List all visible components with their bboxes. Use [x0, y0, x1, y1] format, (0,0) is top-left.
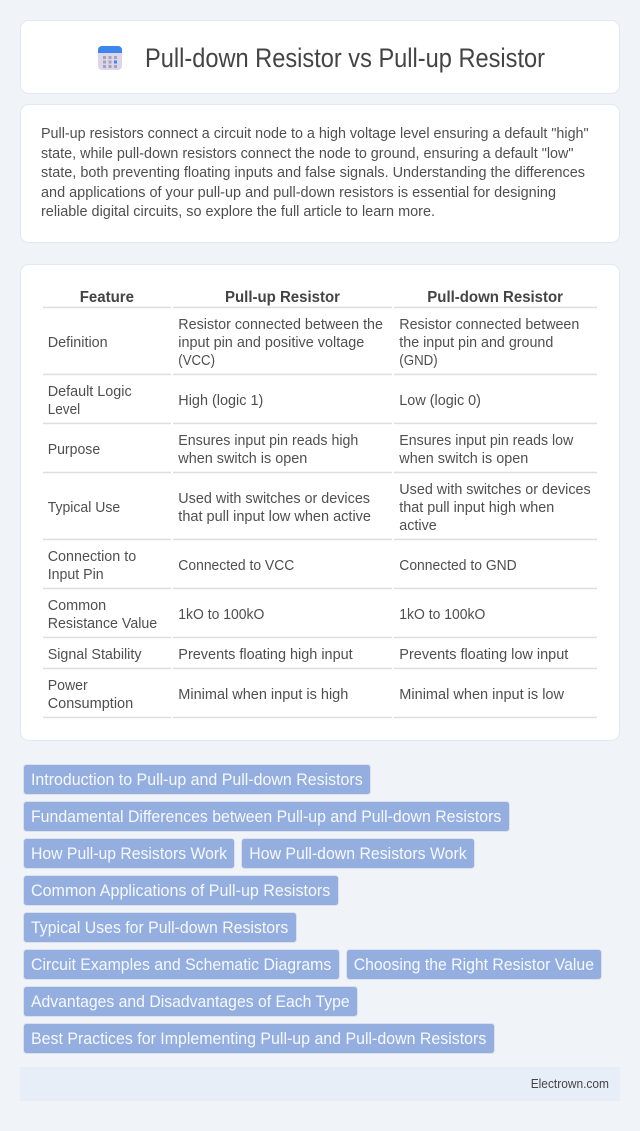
- table row: connection to input pin: Connection to: [48, 548, 136, 565]
- text block: introduction paragraph: reliable digital circuits, so explore the full article to learn more.: [41, 203, 435, 220]
- text block: introduction paragraph: state, both preventing floating inputs and false signals. Understanding the differences: [41, 164, 585, 181]
- table header row: [80, 289, 563, 306]
- table row: default logic level: Level: [48, 401, 80, 418]
- table row: common resistance value: Resistance Value: [48, 615, 157, 632]
- table row: signal stability: [48, 646, 569, 663]
- table row: definition: Resistor connected between the: [178, 316, 383, 333]
- tag: how pull-up resistors work: How Pull-up Resistors Work: [31, 845, 228, 863]
- table row: default logic level: High (logic 1): [178, 392, 263, 409]
- table row: purpose: [48, 432, 573, 467]
- tag: how pull-down resistors work: How Pull-down Resistors Work: [249, 845, 467, 863]
- tag: common applications: [24, 876, 338, 906]
- table row: connection to input pin: Input Pin: [48, 566, 104, 583]
- text block: introduction paragraph: [41, 125, 589, 220]
- table row: default logic level: [48, 383, 481, 418]
- table row: power consumption: Power: [48, 677, 88, 694]
- table row: purpose: when switch is open: [177, 450, 307, 467]
- panel: comparison table: [20, 264, 620, 740]
- panel: introduction: [20, 104, 620, 242]
- table row: definition: (GND): [399, 352, 438, 369]
- panel: header: [20, 20, 620, 94]
- table header row: Feature: [80, 289, 134, 306]
- table row: typical use: Used with switches or devices: [178, 490, 370, 507]
- text block: introduction paragraph: and applications of your pull-up and pull-down resistors is essential for designing: [41, 184, 556, 201]
- table row: purpose: Ensures input pin reads high: [178, 432, 358, 449]
- table row: typical use: that pull input low when active: [178, 508, 371, 525]
- table row: definition: (VCC): [178, 352, 215, 369]
- tag: circuit examples: Circuit Examples and Schematic Diagrams: [31, 956, 331, 974]
- table row: power consumption: Consumption: [48, 695, 133, 712]
- table row: typical use: that pull input high when: [399, 499, 554, 516]
- table row: definition: Resistor connected between: [399, 316, 579, 333]
- table row: connection to input pin: Connected to GND: [399, 557, 517, 574]
- table row: definition: input pin and positive voltage: [178, 334, 364, 351]
- tag: how pull-down resistors work: [242, 838, 474, 868]
- tag: best practices: Best Practices for Implementing Pull-up and Pull-down Resistors: [31, 1030, 486, 1048]
- footer: [20, 1067, 620, 1101]
- tag: typical uses: [24, 912, 296, 942]
- title: Pull-down Resistor vs Pull-up Resistor: [145, 43, 545, 73]
- table row: signal stability: Signal Stability: [48, 646, 142, 663]
- footer credit: Electrown.com: [531, 1076, 609, 1091]
- tag: choosing the right value: [346, 950, 602, 980]
- tag: advantages and disadvantages: Advantages and Disadvantages of Each Type: [31, 993, 350, 1011]
- table row: purpose: when switch is open: [398, 450, 528, 467]
- tag: advantages and disadvantages: [24, 986, 358, 1016]
- table row: connection to input pin: [48, 548, 517, 583]
- tag: introduction: [24, 764, 370, 794]
- tag: choosing the right value: Choosing the Right Resistor Value: [354, 956, 594, 974]
- table row: definition: the input pin and ground: [399, 334, 553, 351]
- table header row: Pull-up Resistor: [225, 289, 340, 306]
- tag: best practices: [24, 1024, 494, 1054]
- table row: purpose: Purpose: [48, 441, 100, 458]
- table row: default logic level: Default Logic: [48, 383, 132, 400]
- table row: common resistance value: 1kO to 100kO: [399, 606, 485, 623]
- table row: typical use: [48, 481, 591, 534]
- table row: purpose: Ensures input pin reads low: [399, 432, 573, 449]
- tag: fundamental differences: Fundamental Differences between Pull-up and Pull-down Resistors: [31, 808, 501, 826]
- tag: common applications: Common Applications of Pull-up Resistors: [31, 882, 330, 900]
- table row: definition: [48, 316, 579, 369]
- table row: common resistance value: [48, 597, 485, 632]
- tag: circuit examples: [24, 950, 340, 980]
- table row: common resistance value: 1kO to 100kO: [178, 606, 264, 623]
- text block: introduction paragraph: state, while pull-down resistors connect the node to ground, ensuring a default "low": [41, 145, 574, 162]
- panel: topic tags: [24, 764, 602, 1054]
- table row: power consumption: [48, 677, 564, 712]
- table row: default logic level: Low (logic 0): [399, 392, 481, 409]
- table header row: Pull-down Resistor: [427, 289, 563, 306]
- table row: typical use: active: [399, 517, 437, 534]
- table row: connection to input pin: Connected to VCC: [178, 557, 294, 574]
- table row: typical use: Typical Use: [48, 499, 120, 516]
- table row: typical use: Used with switches or devices: [399, 481, 591, 498]
- icon: calendar grid: [98, 46, 122, 70]
- table row: power consumption: Minimal when input is high: [178, 686, 348, 703]
- table row: power consumption: Minimal when input is low: [399, 686, 564, 703]
- table row: common resistance value: Common: [48, 597, 106, 614]
- tag: how pull-up resistors work: [24, 838, 234, 868]
- text block: introduction paragraph: Pull-up resistors connect a circuit node to a high voltage level ensuring a default "high": [41, 125, 589, 142]
- table row: signal stability: Prevents floating high input: [178, 646, 354, 663]
- tag: typical uses: Typical Uses for Pull-down Resistors: [31, 919, 288, 937]
- tag: introduction: Introduction to Pull-up and Pull-down Resistors: [31, 771, 363, 789]
- table row: definition: Definition: [48, 334, 108, 351]
- tag: fundamental differences: [24, 802, 510, 832]
- table row: signal stability: Prevents floating low input: [399, 646, 569, 663]
